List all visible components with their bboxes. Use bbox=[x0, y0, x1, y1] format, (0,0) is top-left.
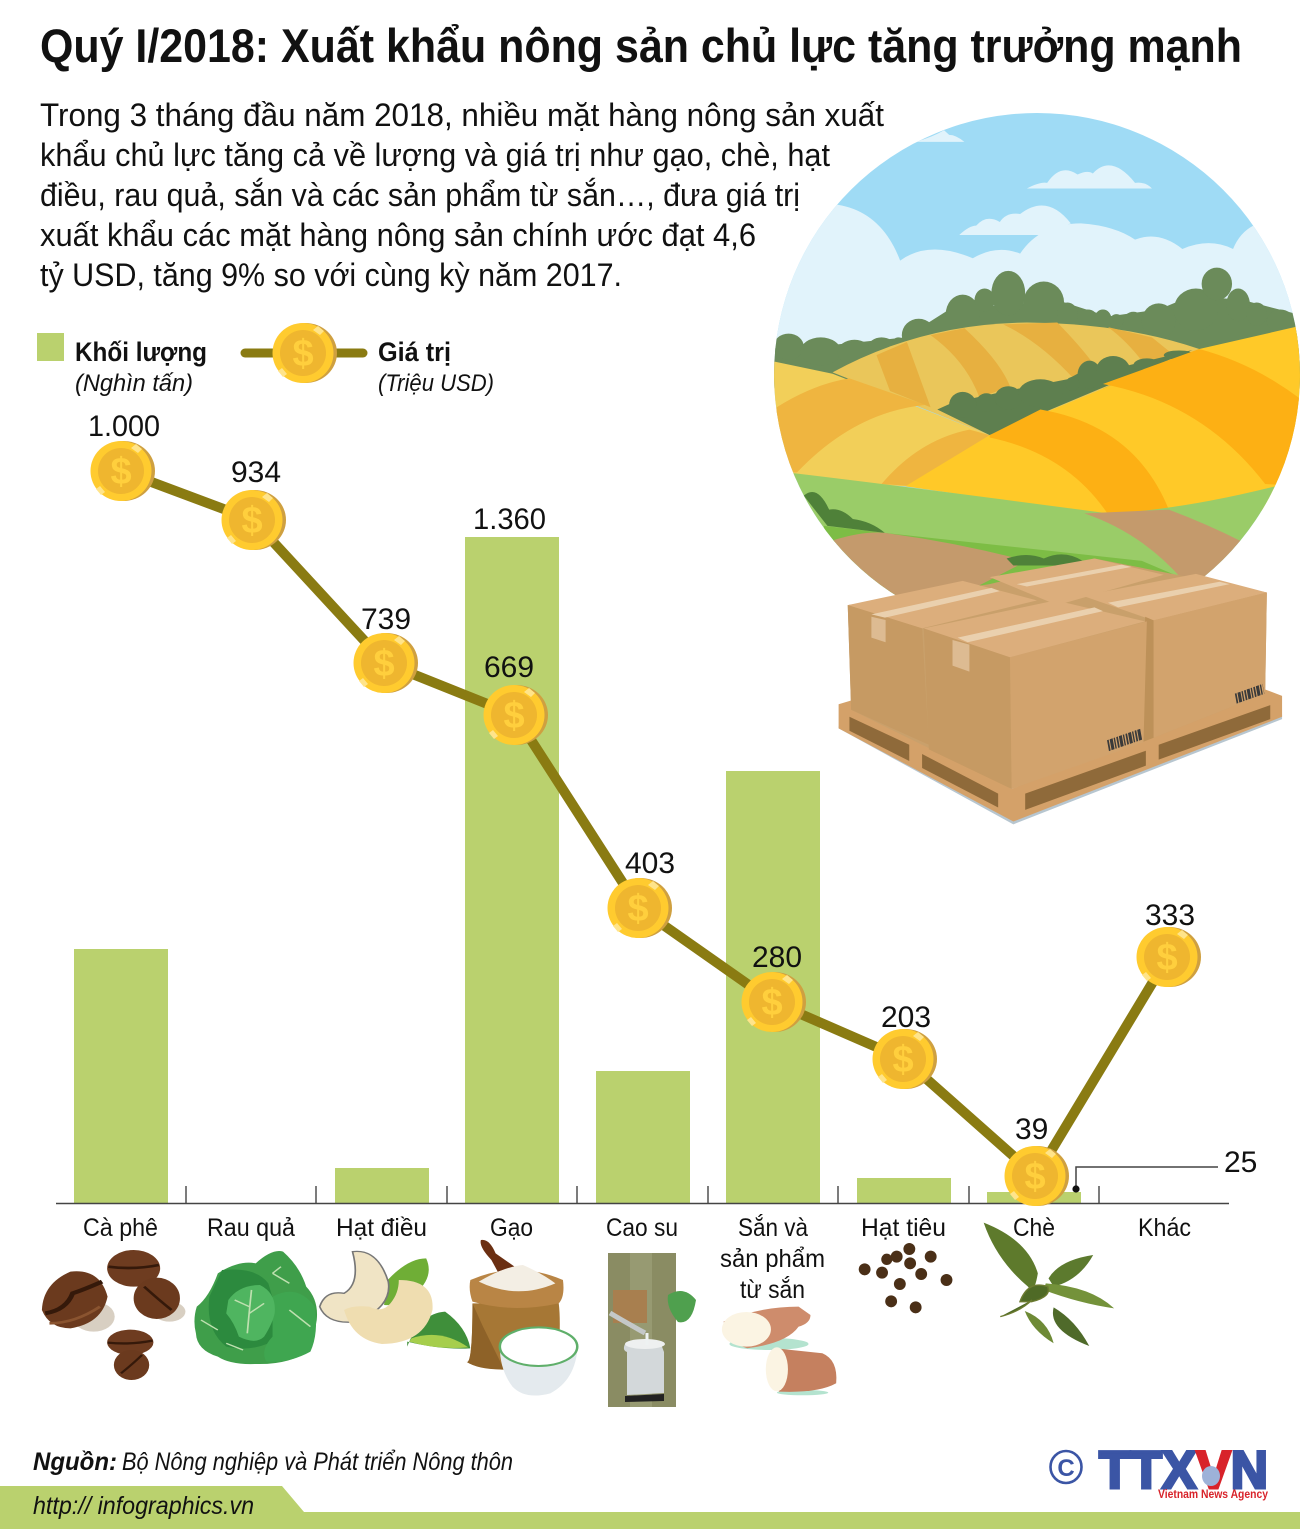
cardboard boxes bbox=[848, 559, 1267, 789]
callout: tea volume leader line bbox=[1072, 1167, 1218, 1193]
value labels: 669 bbox=[484, 651, 534, 684]
coin: cashew: $ bbox=[373, 643, 395, 685]
coin: vegetables bbox=[222, 490, 286, 550]
value labels: 39 bbox=[1015, 1113, 1048, 1146]
coin: other bbox=[1136, 927, 1201, 987]
value labels: 403 bbox=[625, 847, 675, 880]
source line bbox=[33, 1448, 513, 1476]
farm landscape circle bbox=[774, 113, 1300, 595]
coin: vegetables: $ bbox=[241, 500, 263, 542]
intro paragraph: tỷ USD, tăng 9% so với cùng kỳ năm 2017. bbox=[40, 257, 622, 293]
coin: rubber bbox=[608, 878, 672, 938]
value labels: 203 bbox=[881, 1001, 931, 1034]
bar chart: export volume bbox=[74, 537, 1081, 1204]
logo: TTXVN: TTXVN bbox=[1099, 1441, 1268, 1500]
coin: tea: $ bbox=[1024, 1156, 1046, 1198]
value labels: 1.360 bbox=[473, 503, 546, 536]
category labels bbox=[83, 1213, 1191, 1304]
chart axis bbox=[56, 1186, 1229, 1204]
bar: cashew bbox=[335, 1168, 429, 1204]
coin: rice bbox=[484, 685, 548, 745]
value labels bbox=[88, 410, 1257, 1179]
bar: coffee bbox=[74, 949, 168, 1204]
legend: value line bbox=[245, 348, 363, 358]
category labels: từ sắn bbox=[740, 1275, 805, 1304]
value labels: 280 bbox=[752, 941, 802, 974]
pallet bbox=[839, 689, 1282, 824]
footer band bbox=[0, 1486, 1300, 1529]
category labels: Cà phê bbox=[83, 1214, 158, 1242]
coin: rice: $ bbox=[503, 695, 525, 737]
legend: value coin bbox=[272, 323, 337, 383]
icon: tea leaves bbox=[984, 1223, 1114, 1346]
icon: rubber tree tapping bbox=[608, 1253, 696, 1407]
value labels: 739 bbox=[361, 603, 411, 636]
category labels: Chè bbox=[1013, 1214, 1055, 1242]
intro paragraph: điều, rau quả, sắn và các sản phẩm từ sắn…, đưa giá trị bbox=[40, 177, 800, 213]
coin: cassava: $ bbox=[761, 982, 783, 1024]
legend bbox=[37, 323, 494, 397]
coin: coffee: $ bbox=[110, 451, 132, 493]
line chart: export value bbox=[122, 471, 1168, 1176]
coin: cassava bbox=[742, 972, 806, 1032]
icon: peppercorns bbox=[859, 1243, 952, 1313]
icon: coffee beans bbox=[42, 1250, 185, 1380]
bar: cassava bbox=[726, 771, 820, 1204]
value labels: 1.000 bbox=[88, 410, 160, 443]
category labels: Rau quả bbox=[207, 1214, 295, 1242]
coin: pepper: $ bbox=[892, 1039, 914, 1081]
website url: http:// infographics.vn bbox=[33, 1492, 254, 1520]
legend: volume label: Khối lượng bbox=[75, 337, 207, 367]
value labels: 25 bbox=[1224, 1146, 1257, 1179]
coin markers bbox=[90, 441, 1201, 1206]
category labels: Hạt tiêu bbox=[861, 1214, 946, 1242]
source label: Nguồn: bbox=[33, 1448, 117, 1476]
legend: value label: Giá trị bbox=[378, 337, 451, 367]
illustration: farm fields and cardboard boxes on a pallet bbox=[770, 100, 1300, 824]
legend: volume unit: (Nghìn tấn) bbox=[75, 370, 193, 397]
category labels: Cao su bbox=[606, 1214, 678, 1242]
bar: rice bbox=[465, 537, 559, 1204]
intro paragraph: xuất khẩu các mặt hàng nông sản chính ước đạt 4,6 bbox=[40, 217, 756, 253]
legend: value coin: $ bbox=[292, 333, 314, 375]
legend: value unit: (Triệu USD) bbox=[378, 370, 494, 397]
icon: green vegetable bbox=[194, 1251, 317, 1364]
bar: pepper bbox=[857, 1178, 951, 1204]
logo: copyright mark bbox=[1050, 1451, 1082, 1483]
bar: tea bbox=[987, 1192, 1081, 1204]
logo: TTXVN: Vietnam News Agency bbox=[1158, 1489, 1269, 1501]
icon: cassava roots bbox=[722, 1307, 836, 1395]
coin: cashew bbox=[354, 633, 418, 693]
intro paragraph: khẩu chủ lực tăng cả về lượng và giá trị như gạo, chè, hạt bbox=[40, 137, 830, 173]
value labels: 333 bbox=[1145, 899, 1195, 932]
coin: coffee bbox=[90, 441, 155, 501]
category labels: sản phẩm bbox=[720, 1245, 825, 1273]
coin: tea bbox=[1004, 1146, 1069, 1206]
coin: other: $ bbox=[1156, 937, 1178, 979]
coin: pepper bbox=[872, 1029, 937, 1089]
source text: Bộ Nông nghiệp và Phát triển Nông thôn bbox=[122, 1448, 513, 1476]
value labels: 934 bbox=[231, 456, 281, 489]
category labels: Gạo bbox=[490, 1214, 533, 1242]
category labels: Sắn và bbox=[738, 1213, 808, 1242]
coin: rubber: $ bbox=[627, 888, 649, 930]
logo: copyright mark: C bbox=[1057, 1455, 1075, 1482]
icon: rice sack and bowl bbox=[466, 1240, 578, 1396]
icon: cashew nuts bbox=[320, 1251, 470, 1349]
intro paragraph bbox=[40, 97, 884, 293]
category labels: Khác bbox=[1138, 1214, 1191, 1242]
legend: volume swatch bbox=[37, 333, 64, 361]
bar: rubber bbox=[596, 1071, 690, 1204]
intro paragraph: Trong 3 tháng đầu năm 2018, nhiều mặt hàng nông sản xuất bbox=[40, 97, 884, 133]
category labels: Hạt điều bbox=[336, 1214, 427, 1242]
